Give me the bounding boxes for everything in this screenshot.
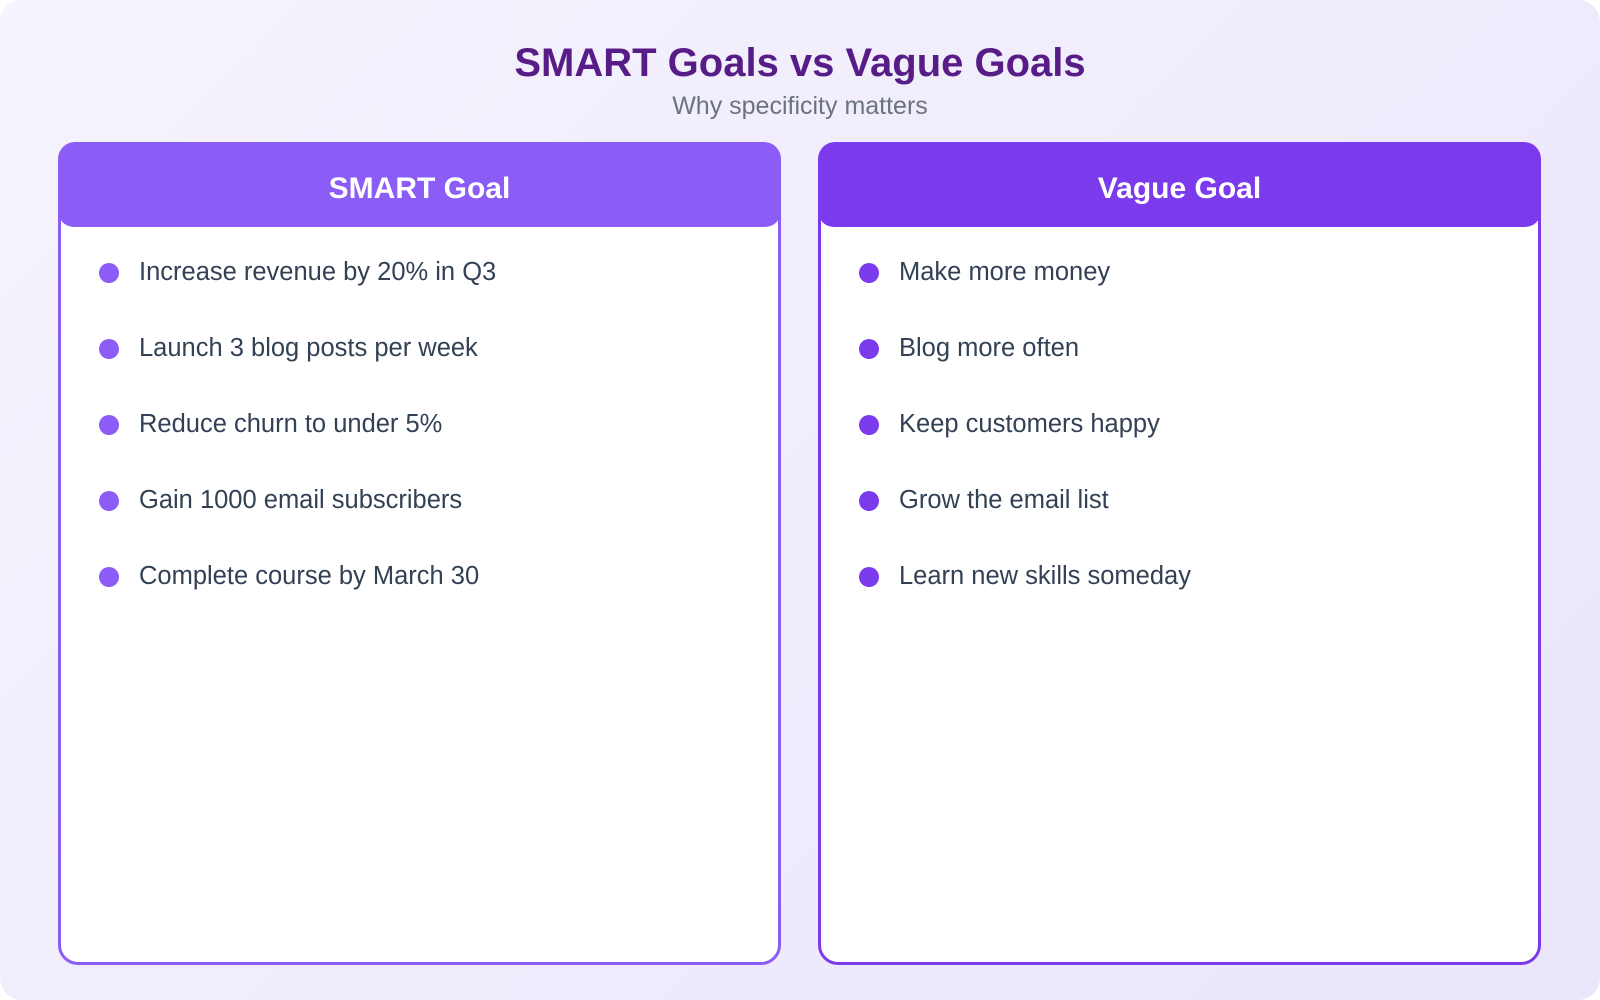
panel: Vague goal: Learn new skills someday (899, 562, 1191, 590)
panel: SMART goal: Increase revenue by 20% in Q3 (139, 258, 496, 286)
subtitle: Why specificity matters (672, 92, 928, 120)
item 3 (99, 410, 442, 438)
panel: SMART goal: Complete course by March 30 (139, 562, 479, 590)
header: Vague Goal (818, 142, 1541, 227)
title: SMART Goals vs Vague Goals (514, 41, 1086, 85)
item 2 (99, 334, 478, 362)
panel: SMART goal (58, 142, 781, 965)
panel: SMART goal: Gain 1000 email subscribers (139, 486, 462, 514)
header: Vague Goal: Vague Goal (1098, 172, 1261, 205)
item 5 (859, 562, 1191, 590)
item 1 (859, 258, 1110, 286)
item 4 (99, 486, 462, 514)
item 3 (859, 410, 1160, 438)
panel: SMART goal: Reduce churn to under 5% (139, 410, 442, 438)
panel: Vague goal: Grow the email list (899, 486, 1109, 514)
item 4 (859, 486, 1109, 514)
item 1 (99, 258, 496, 286)
panel: Vague goal: Make more money (899, 258, 1110, 286)
header: SMART Goal: SMART Goal (329, 172, 510, 205)
item 2 (859, 334, 1079, 362)
panel: SMART goal: Launch 3 blog posts per week (139, 334, 478, 362)
panel: Vague goal: Keep customers happy (899, 410, 1160, 438)
panel: Vague goal: Blog more often (899, 334, 1079, 362)
item 5 (99, 562, 479, 590)
header: SMART Goal (58, 142, 781, 227)
panel: Vague goal (818, 142, 1541, 965)
